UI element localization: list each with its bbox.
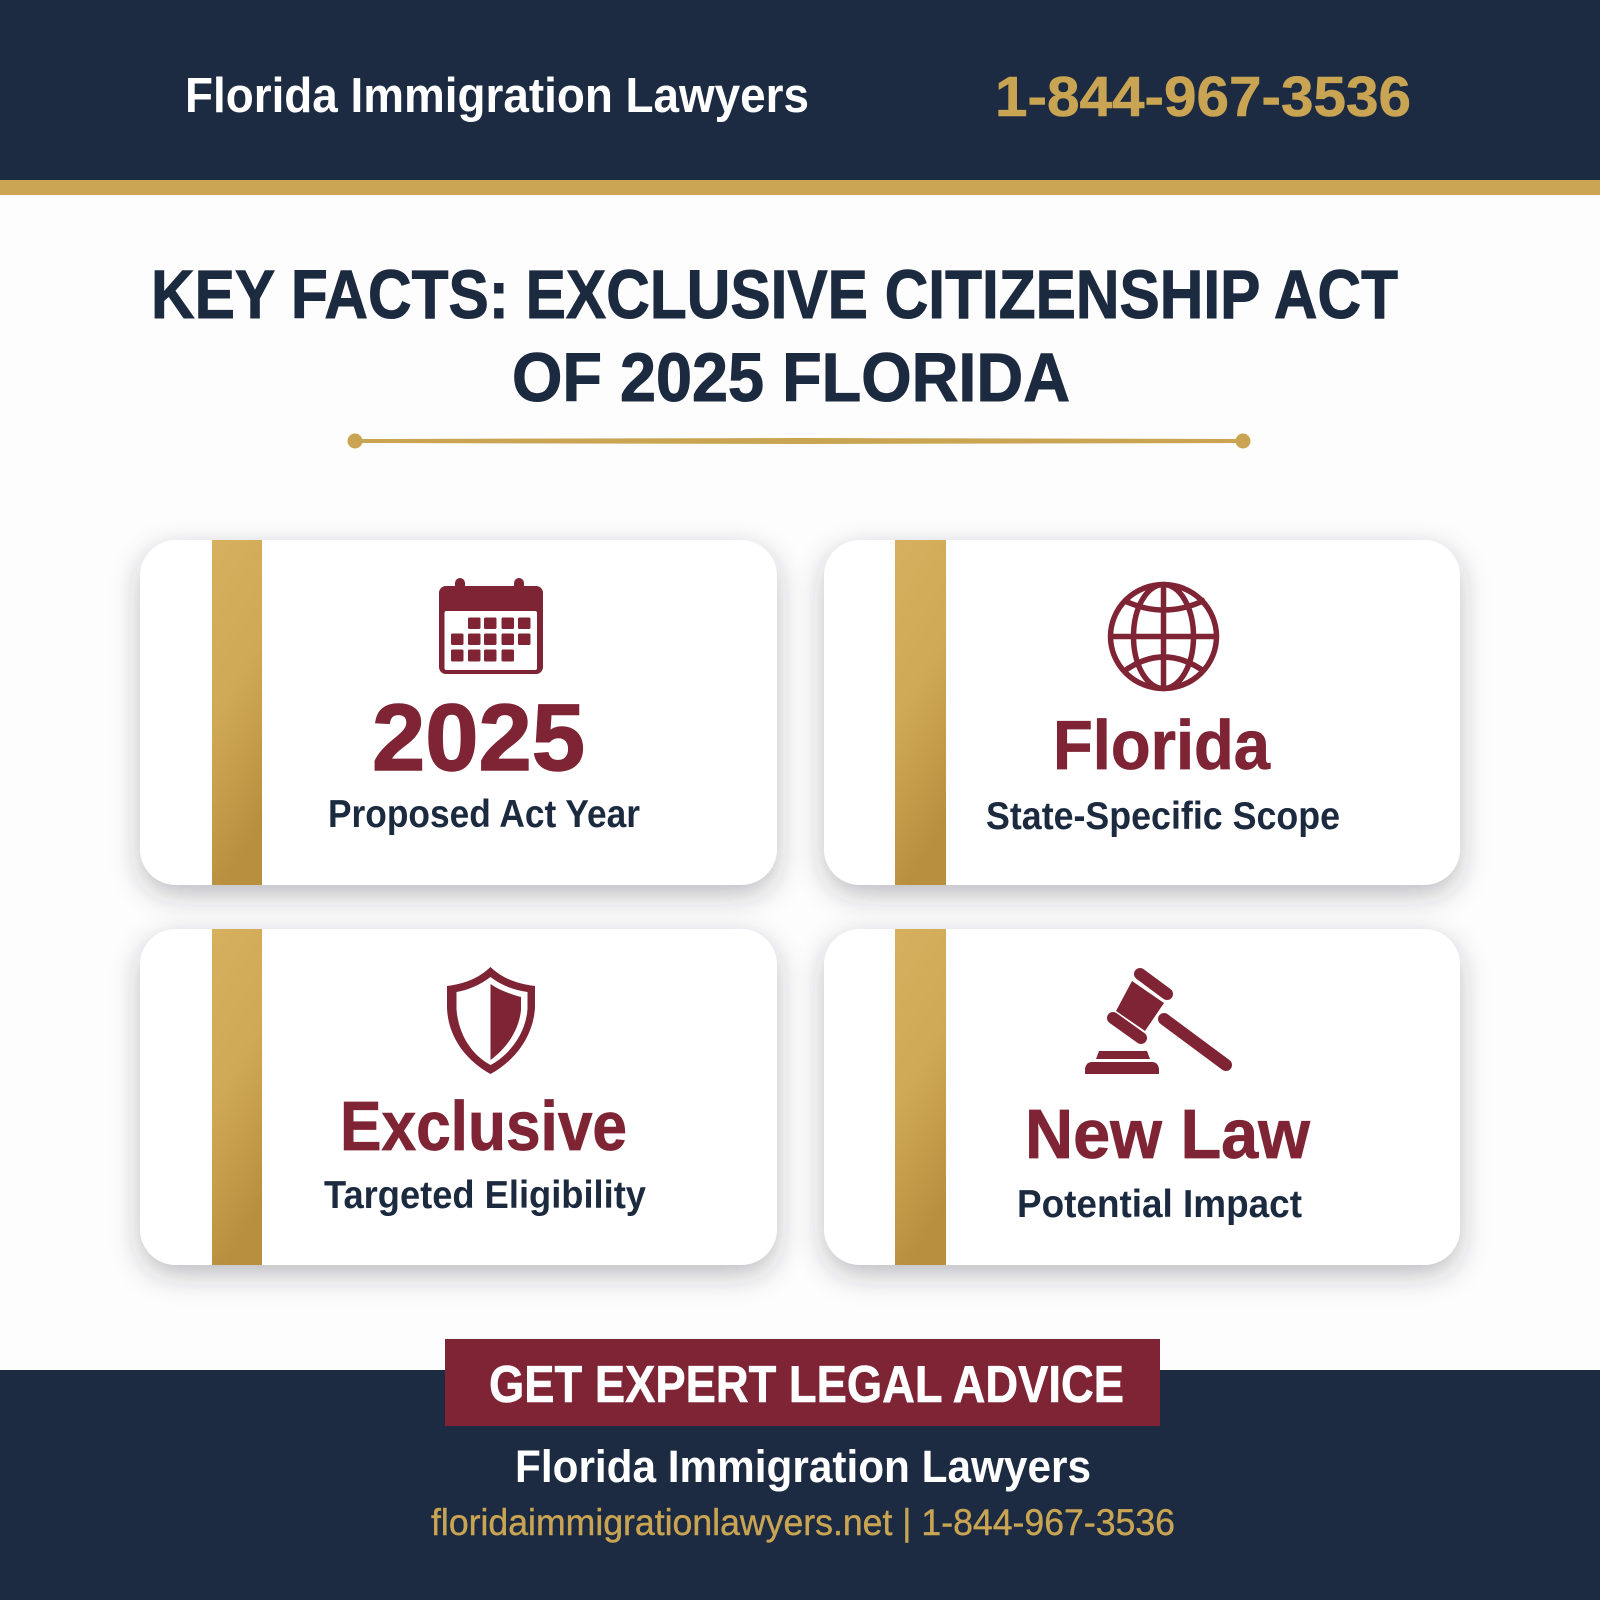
gold bar [212,929,262,1265]
icon: globe [1110,584,1217,689]
gold bar [895,929,946,1265]
stat: Florida: Florida [1053,706,1271,784]
header firm name: Florida Immigration Lawyers [185,69,809,123]
call to action banner [445,1339,1160,1426]
panel: 2025 [140,540,777,885]
stat: Exclusive: Exclusive [340,1087,627,1165]
call to action banner: GET EXPERT LEGAL ADVICE [489,1356,1124,1414]
gold bar [895,540,946,885]
footer firm name: Florida Immigration Lawyers [515,1441,1091,1492]
title divider [348,434,1250,448]
icon: calendar [439,578,543,674]
title: OF 2025 FLORIDA [512,339,1070,416]
label: proposed act year: Proposed Act Year [328,793,640,836]
icon: gavel [1085,974,1226,1074]
footer band [0,1339,1600,1600]
stat: New Law: New Law [1025,1095,1311,1173]
label: state-specific scope: State-Specific Scope [986,795,1340,838]
icon: shield [447,967,535,1074]
label: targeted eligibility: Targeted Eligibility [324,1174,646,1217]
header phone number: 1-844-967-3536 [995,65,1411,129]
panel: New Law [824,929,1460,1265]
card background [140,929,777,1265]
title: KEY FACTS: EXCLUSIVE CITIZENSHIP ACT [151,256,1398,333]
label: potential impact: Potential Impact [1017,1183,1302,1226]
card background [824,540,1460,885]
header band [0,0,1600,195]
title [151,256,1398,416]
card background [824,929,1460,1265]
card background [140,540,777,885]
stat: 2025: 2025 [372,685,585,791]
footer contact line: floridaimmigrationlawyers.net | 1-844-967-3536 [431,1502,1175,1543]
panel: Exclusive [140,929,777,1265]
panel: Florida [824,540,1460,885]
gold bar [212,540,262,885]
